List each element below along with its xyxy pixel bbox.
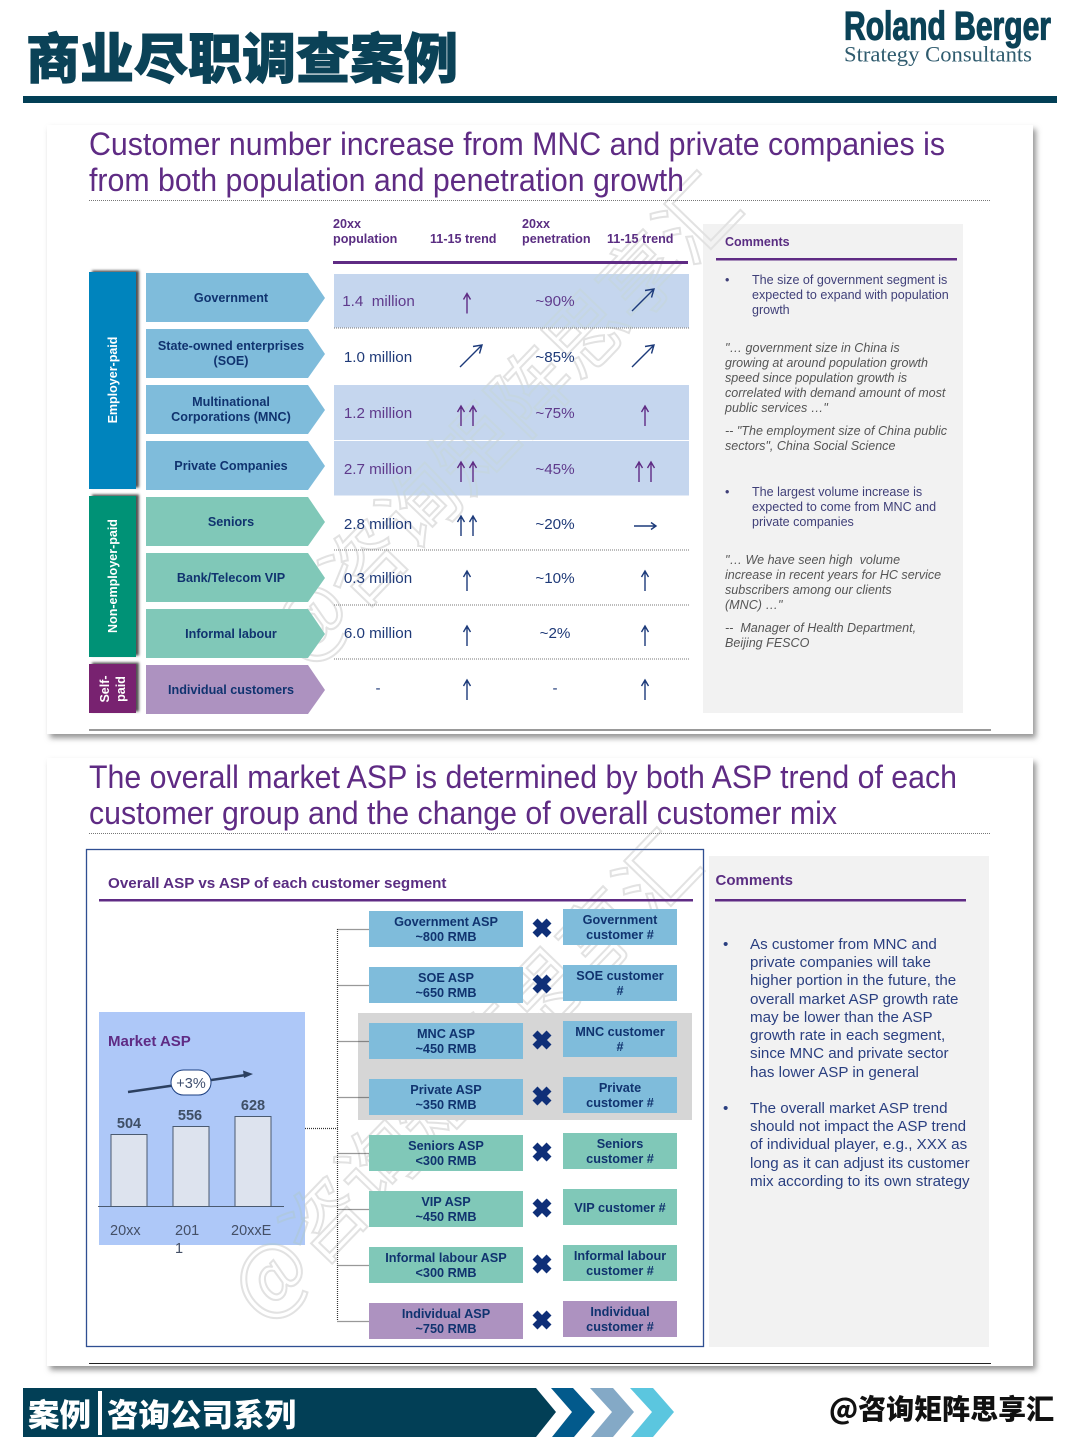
row: MNC: ~450 RMB: [416, 1042, 476, 1056]
bar values: 556: [178, 1108, 202, 1124]
trend arrow: +3%: [176, 1076, 206, 1092]
row: individual values: [375, 680, 648, 700]
row: informal labour: [369, 1245, 677, 1283]
footer banner: [23, 1388, 556, 1437]
table column headers: 11-15 trend: [607, 232, 674, 246]
comment: customer mix: •: [723, 936, 728, 953]
panel title: customer group and the change of overall customer mix: [89, 795, 837, 831]
comment: customer mix: growth rate in each segment,: [750, 1027, 945, 1044]
row: informal labour: <300 RMB: [416, 1266, 476, 1280]
chart heading: Overall ASP vs ASP of each customer segment: [108, 875, 446, 892]
comment: customer mix: overall market ASP growth rate: [750, 991, 958, 1008]
row: informal labour values: ~2%: [540, 625, 570, 642]
quote: government size: sectors", China Social Science: [725, 439, 895, 453]
quote: government size: speed since population growth is: [725, 371, 908, 385]
comments heading: Comments: [725, 235, 790, 249]
row: informal labour: Informal labour ASP: [385, 1251, 507, 1265]
panel title: from both population and penetration growth: [89, 162, 684, 198]
table column headers: 20xx: [522, 217, 550, 231]
row: VIP: VIP ASP: [421, 1195, 471, 1209]
watermark: @咨询矩阵思享汇: [238, 146, 763, 684]
row: SOE values: [344, 345, 654, 367]
quote: government size: -- "The employment size of China public: [725, 424, 948, 438]
table column headers: population: [333, 232, 397, 246]
quote: government size: "… government size in China is: [725, 341, 900, 355]
side label: self-paid: [89, 664, 136, 713]
side label: employer-paid: [89, 272, 136, 489]
row: private: [369, 1077, 677, 1115]
quote: government size: public services …": [724, 401, 828, 415]
segment: informal labour: Informal labour: [185, 627, 277, 641]
comment: government segment: •: [725, 273, 729, 287]
segment: individual customers: Individual customers: [168, 683, 294, 697]
row: informal labour: Informal labour: [574, 1249, 666, 1263]
comment: customer mix: As customer from MNC and: [750, 936, 937, 953]
bars: [111, 1134, 147, 1206]
row: seniors: customer #: [586, 1152, 654, 1166]
quote: HC service: increase in recent years for HC service: [725, 568, 941, 582]
row: MNC: MNC customer: [575, 1025, 665, 1039]
row: private: Private ASP: [410, 1083, 482, 1097]
row: SOE: ~650 RMB: [416, 986, 476, 1000]
comment: government segment: growth: [752, 303, 790, 317]
row: SOE: SOE customer: [576, 969, 664, 983]
quote: government size: correlated with demand amount of most: [725, 386, 946, 400]
row: MNC values: ~75%: [535, 405, 575, 422]
quote: HC service: (MNC) …": [725, 598, 783, 612]
row: seniors: Seniors: [597, 1137, 643, 1151]
segment: government: Government: [194, 291, 269, 305]
panel title: Customer number increase from MNC and private companies is: [89, 126, 945, 162]
comment: customer mix: higher portion in the future, the: [750, 972, 956, 989]
segment: government: [146, 273, 325, 322]
row: private values: ~45%: [535, 461, 575, 478]
segment: bank/telecom VIP: [146, 553, 325, 602]
row: SOE: [369, 965, 677, 1003]
row: government values: [342, 289, 654, 314]
row: seniors values: 2.8 million: [344, 516, 412, 533]
logo: Roland Berger: Strategy Consultants: [844, 42, 1032, 66]
chart: market ASP bars: [98, 1012, 305, 1257]
comment: individual player: •: [723, 1100, 728, 1117]
row: MNC values: [344, 405, 648, 426]
logo: Roland Berger: [844, 4, 1051, 66]
comment: volume increase: private companies: [752, 515, 854, 529]
row: private values: [344, 461, 654, 482]
side label: non-employer-paid: Non-employer-paid: [106, 519, 120, 633]
bar values: 628: [241, 1098, 265, 1114]
row: SOE values: ~85%: [535, 349, 575, 366]
row: MNC: #: [616, 1040, 624, 1054]
comment: individual player: of individual player, e.g., XXX as: [750, 1136, 968, 1153]
comment: customer mix: private companies will take: [750, 954, 931, 971]
row: individual: Individual: [590, 1305, 650, 1319]
row: government: [369, 909, 677, 947]
footer handle: @咨询矩阵思享汇: [829, 1388, 1054, 1428]
comment: individual player: long as it can adjust its customer: [750, 1155, 970, 1172]
row: MNC: MNC ASP: [417, 1027, 476, 1041]
row: informal labour values: [344, 625, 648, 646]
row: MNC values: 1.2 million: [344, 405, 412, 422]
comment: individual player: should not impact the ASP trend: [750, 1118, 966, 1135]
row: private: ~350 RMB: [416, 1098, 476, 1112]
comment: customer mix: may be lower than the ASP: [750, 1009, 933, 1026]
axis labels: 20xxE: [231, 1223, 272, 1239]
header rule: [23, 96, 1057, 103]
comment: government segment: [725, 273, 949, 317]
comment: individual player: [723, 1100, 970, 1190]
row: informal labour: customer #: [586, 1264, 654, 1278]
table column headers: penetration: [522, 232, 591, 246]
comments background: [709, 856, 989, 1347]
side label: self-paid: paid: [114, 676, 128, 702]
row: seniors: <300 RMB: [416, 1154, 476, 1168]
row: government: Government ASP: [394, 915, 498, 929]
table column headers: [333, 217, 688, 264]
segment: SOE: (SOE): [214, 354, 248, 368]
quote: HC service: -- Manager of Health Department,: [725, 621, 916, 635]
row: government values: ~90%: [535, 293, 575, 310]
side label: self-paid: Self-: [98, 675, 112, 703]
footer banner: 咨询公司系列: [107, 1390, 296, 1436]
row: government values: 1.4 million: [342, 293, 415, 310]
comments heading: Comments: [716, 872, 793, 889]
row: individual: ~750 RMB: [416, 1322, 476, 1336]
row: individual values: -: [375, 680, 381, 697]
segment: SOE: State-owned enterprises: [158, 339, 304, 353]
segment: MNC: Corporations (MNC): [171, 410, 291, 424]
row: SOE: SOE ASP: [418, 971, 475, 985]
row: VIP: VIP customer #: [574, 1201, 666, 1215]
comment: volume increase: •: [725, 485, 729, 499]
row: private: Private: [599, 1081, 641, 1095]
row: private values: 2.7 million: [344, 461, 412, 478]
comment: government segment: The size of government segment is: [752, 273, 947, 287]
comment: volume increase: The largest volume increase is: [752, 485, 922, 499]
comment: government segment: expected to expand with population: [752, 288, 949, 302]
axis labels: 1: [175, 1241, 183, 1257]
comment: customer mix: has lower ASP in general: [750, 1064, 919, 1081]
comment: volume increase: expected to come from MNC and: [752, 500, 936, 514]
row: VIP values: 0.3 million: [344, 570, 412, 587]
watermark: [198, 146, 763, 1341]
comment: customer mix: since MNC and private sector: [750, 1045, 949, 1062]
segment: SOE: [146, 329, 325, 378]
panel: customer number: [47, 125, 1033, 734]
chart: market ASP bars: Market ASP: [108, 1033, 191, 1050]
row: government: customer #: [586, 928, 654, 942]
segment: private companies: [146, 441, 325, 490]
table column headers: 20xx: [333, 217, 361, 231]
row: seniors values: ~20%: [535, 516, 575, 533]
connector tree: [305, 929, 369, 1322]
row highlights: [334, 274, 689, 659]
row: individual values: -: [552, 680, 558, 697]
row: SOE values: 1.0 million: [344, 349, 412, 366]
bar values: 504: [117, 1116, 141, 1132]
row: individual: Individual ASP: [402, 1307, 491, 1321]
segment: MNC: [146, 385, 325, 434]
comment: individual player: The overall market ASP trend: [750, 1100, 948, 1117]
side label: non-employer-paid: [89, 496, 136, 657]
row: individual: customer #: [586, 1320, 654, 1334]
row: VIP values: ~10%: [535, 570, 575, 587]
row: individual: [369, 1301, 677, 1339]
row: seniors values: [344, 516, 656, 536]
segment: individual customers: [146, 665, 325, 714]
row: private: customer #: [586, 1096, 654, 1110]
quote: government size: growing at around population growth: [725, 356, 928, 370]
segment: bank/telecom VIP: Bank/Telecom VIP: [177, 571, 285, 585]
panel title: The overall market ASP is determined by both ASP trend of each: [89, 759, 957, 795]
row: government: Government: [583, 913, 658, 927]
row: VIP values: [344, 570, 648, 591]
quote: HC service: subscribers among our clients: [725, 583, 892, 597]
row: seniors: [369, 1133, 677, 1171]
row: informal labour values: 6.0 million: [344, 625, 412, 642]
highlight: MNC and private: [358, 1013, 692, 1120]
trend arrow: [128, 1070, 253, 1095]
table column headers: 11-15 trend: [430, 232, 496, 246]
segment: private companies: Private Companies: [174, 459, 288, 473]
segment: informal labour: [146, 609, 325, 658]
panel: market ASP: [47, 758, 1033, 1366]
row: VIP: [369, 1189, 677, 1227]
axis labels: 201: [175, 1223, 199, 1239]
row: SOE: #: [616, 984, 624, 998]
panel title: [89, 759, 957, 831]
footer chevrons: [551, 1388, 674, 1437]
segment: seniors: Seniors: [208, 515, 254, 529]
quote: HC service: "… We have seen high volume: [725, 553, 900, 567]
segment: MNC: Multinational: [192, 395, 270, 409]
side label: employer-paid: Employer-paid: [106, 337, 120, 423]
comment: volume increase: [725, 485, 936, 529]
title: 商业尽职调查案例: [26, 15, 458, 94]
segment: seniors: [146, 497, 325, 546]
axis labels: 20xx: [110, 1223, 141, 1239]
row: government: ~800 RMB: [416, 930, 476, 944]
panel title: [89, 126, 945, 198]
watermark: @咨询矩阵思享汇: [198, 803, 723, 1341]
row: MNC: [369, 1021, 677, 1059]
row: seniors: Seniors ASP: [408, 1139, 484, 1153]
footer banner: 案例: [28, 1390, 91, 1436]
chart frame: [86, 850, 704, 1346]
comment: customer mix: [723, 936, 958, 1081]
quote: HC service: Beijing FESCO: [725, 636, 810, 650]
comment: individual player: mix according to its own strategy: [750, 1173, 970, 1190]
comments background: [703, 224, 963, 713]
row: VIP: ~450 RMB: [416, 1210, 476, 1224]
